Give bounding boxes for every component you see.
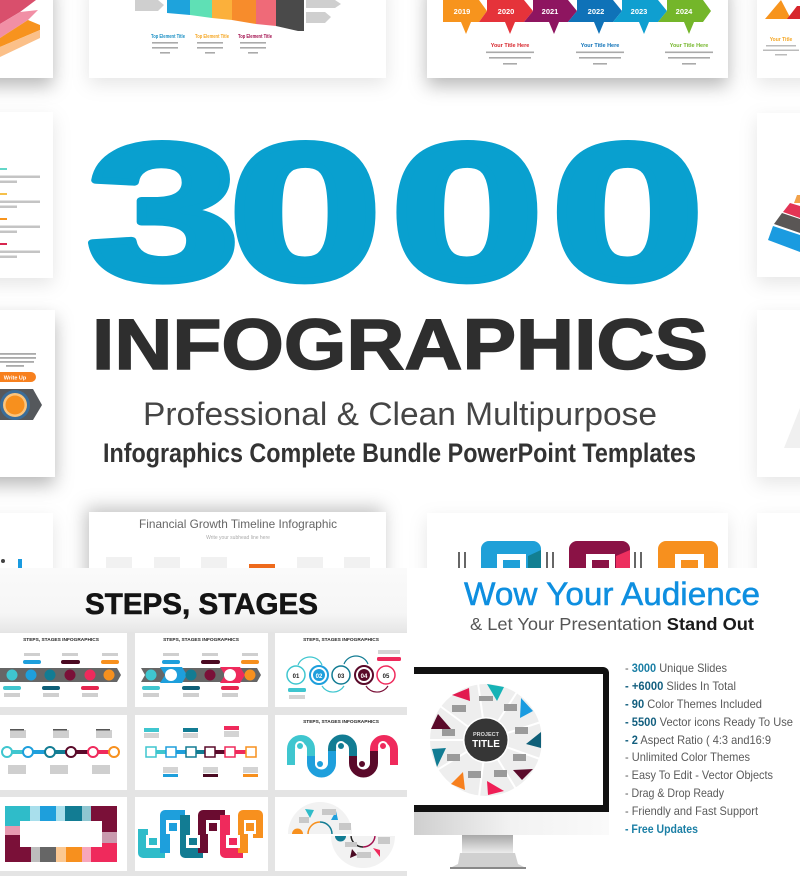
card: year arrow timeline: 2020 — [498, 7, 514, 16]
card: year arrow timeline: Your Title Here — [670, 43, 708, 49]
card: funnel steps: Top Element Title — [238, 34, 272, 40]
feature list: - Drag & Drop Ready — [625, 786, 724, 800]
card: left hexagon step — [0, 310, 55, 477]
feature list — [625, 661, 793, 836]
panel: steps stages — [0, 568, 407, 876]
slide: arrow band 1: STEPS, STAGES INFOGRAPHICS — [23, 637, 100, 643]
feature list: - Friendly and Fast Support — [625, 804, 759, 818]
monitor stand — [450, 835, 526, 869]
heading: steps stages: STEPS, STAGES — [85, 588, 318, 621]
card: left text list — [0, 112, 53, 278]
card: left hexagon step: Write Up — [4, 376, 27, 382]
feature list: - 90 Color Themes Included — [625, 697, 762, 711]
slide: dotted timeline — [0, 715, 127, 790]
card: year arrow timeline: 2021 — [542, 7, 558, 16]
card: right faded triangle — [757, 310, 800, 477]
card: right partial — [757, 513, 800, 593]
subheading: & Let Your Presentation Stand Out — [470, 614, 754, 634]
card: year arrow timeline — [427, 0, 728, 78]
feature list: - 2 Aspect Ratio ( 4:3 and16:9 — [625, 733, 771, 747]
card: year arrow timeline: 2019 — [454, 7, 470, 16]
card: pyramid corner — [757, 0, 800, 78]
top row of slide thumbnails — [0, 0, 800, 78]
card: right pyramid — [757, 113, 800, 277]
slide: rectangular frame — [0, 797, 127, 871]
card: funnel steps: Top Element Title — [195, 34, 229, 40]
slide: linked circles: 04 — [361, 674, 368, 680]
panel background — [0, 568, 407, 876]
right column background — [407, 568, 800, 876]
slide: meander path — [135, 797, 268, 871]
headline word: INFOGRAPHICS — [92, 306, 708, 385]
heading band — [0, 568, 407, 632]
wheel chart: PROJECT — [473, 732, 500, 738]
monitor mockup — [414, 667, 609, 869]
wheel chart — [430, 683, 542, 797]
wheel chart: TITLE — [472, 739, 500, 750]
card: coloured squares — [427, 513, 728, 593]
heading: wow your audience: Wow Your Audience — [464, 576, 760, 612]
card: year arrow timeline: 2023 — [631, 7, 647, 16]
slide: arrow band 2 — [135, 633, 268, 707]
feature list: - Free Updates — [625, 822, 698, 836]
slide: linked circles — [275, 633, 407, 707]
slide: arrow band 2: STEPS, STAGES INFOGRAPHICS — [163, 637, 240, 643]
card: funnel steps: Top Element Title — [151, 34, 185, 40]
slide: square timeline — [135, 715, 268, 790]
middle row side thumbnails — [0, 112, 800, 477]
feature list: - Easy To Edit - Vector Objects — [625, 768, 773, 782]
card: year arrow timeline: 2024 — [676, 7, 693, 16]
feature list: - Unlimited Color Themes — [625, 750, 750, 764]
slide: linked circles: STEPS, STAGES INFOGRAPHICS — [303, 637, 380, 643]
card: year arrow timeline: Your Title Here — [491, 43, 529, 49]
card: pyramid corner: Your Title — [770, 37, 793, 43]
bottom partial thumbnails — [0, 512, 800, 593]
card: financial growth timeline — [89, 512, 386, 592]
subtitle line 1: Professional & Clean Multipurpose — [143, 396, 657, 432]
slide: linked circles: 03 — [338, 674, 345, 680]
monitor screen — [414, 674, 603, 805]
card: financial growth timeline: Write your subhead line here — [206, 535, 270, 541]
card: financial growth timeline: Financial Growth Timeline Infographic — [139, 517, 337, 531]
slide: wave path: STEPS, STAGES INFOGRAPHICS — [303, 719, 380, 725]
slide: wave path — [275, 715, 407, 790]
slide: linked circles: 02 — [316, 674, 323, 680]
card: left partial — [0, 513, 53, 593]
monitor body — [414, 667, 609, 812]
card: year arrow timeline: 2022 — [588, 7, 604, 16]
slide: linked circles: 05 — [383, 674, 390, 680]
subtitle line 2: Infographics Complete Bundle PowerPoint Templates — [103, 438, 696, 468]
slide: arrow band 1 — [0, 633, 127, 707]
card: isometric layers — [0, 0, 53, 78]
card: funnel steps — [89, 0, 386, 78]
feature list: - 3000 Unique Slides — [625, 661, 727, 675]
monitor chin — [414, 812, 609, 835]
feature list: - +6000 Slides In Total — [625, 679, 736, 693]
slide: s-curve semicircles — [275, 797, 407, 871]
headline number: 3000 — [87, 104, 704, 321]
feature list: - 5500 Vector icons Ready To Use — [625, 715, 793, 729]
slide: linked circles: 01 — [293, 674, 300, 680]
card: year arrow timeline: Your Title Here — [581, 43, 619, 49]
